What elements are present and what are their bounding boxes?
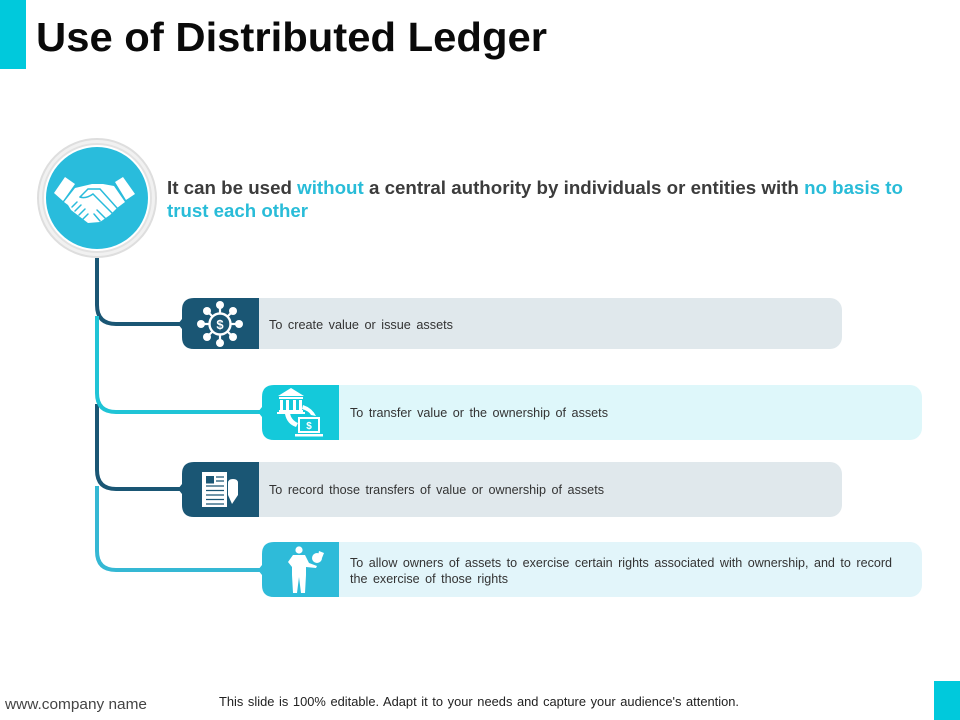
row 1: create value (178, 298, 842, 349)
intro text (167, 177, 903, 221)
icon: bank and laptop: $ (306, 421, 312, 432)
icon: handshake medallion (38, 139, 156, 257)
icon: dollar network (197, 301, 243, 347)
text: To record those transfers of value or ownership of assets (269, 483, 604, 497)
intro text: trust each other (167, 200, 308, 221)
icon: businessman with chart (288, 546, 324, 593)
row 2: transfer value (258, 385, 922, 440)
footer note: This slide is 100% editable. Adapt it to your needs and capture your audience's attention. (219, 695, 739, 709)
text (350, 556, 892, 586)
text: To allow owners of assets to exercise certain rights associated with ownership, and to record (350, 556, 892, 570)
icon: document and pen (202, 472, 238, 507)
intro text: It can be used without a central authority by individuals or entities with no basis to (167, 177, 903, 198)
footer website: www.company name (4, 696, 147, 713)
footer accent block (934, 681, 960, 720)
row 3: record transfers (178, 462, 842, 517)
connector lines (97, 258, 264, 570)
row 4: exercise rights (258, 542, 922, 597)
title accent bar (0, 0, 26, 69)
text: To create value or issue assets (269, 318, 453, 332)
icon: bank and laptop (277, 388, 323, 436)
title: Use of Distributed Ledger (36, 14, 547, 60)
text: To transfer value or the ownership of assets (350, 406, 608, 420)
icon: dollar network: $ (216, 317, 224, 332)
text: the exercise of those rights (350, 572, 508, 586)
